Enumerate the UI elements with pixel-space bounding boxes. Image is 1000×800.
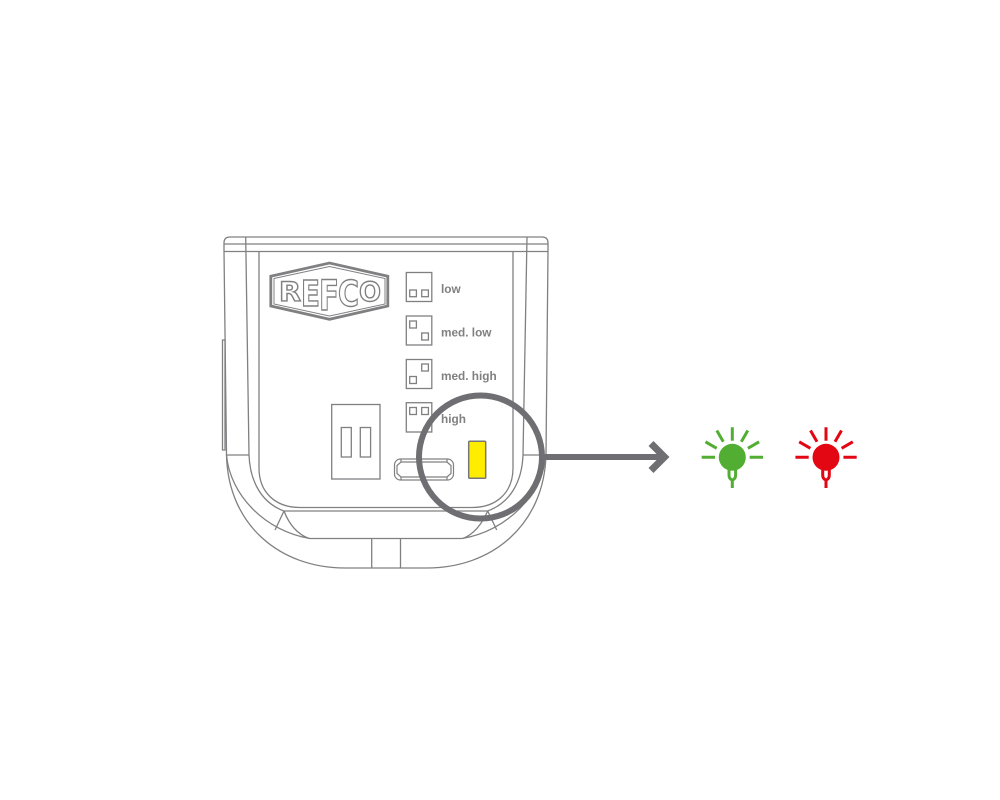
- icon: green LED: [702, 427, 763, 488]
- device housing outline: [222, 237, 548, 568]
- yellow LED indicator: [469, 441, 486, 478]
- label: med. low: med. low: [441, 326, 492, 340]
- REFCO logo: C: [338, 274, 359, 315]
- switch diagram: med. high: [406, 360, 432, 388]
- REFCO logo: R: [279, 277, 301, 308]
- label: high: high: [441, 412, 466, 426]
- switch diagram: high: [406, 403, 432, 432]
- USB port: [394, 459, 454, 480]
- REFCO logo: F: [319, 271, 339, 320]
- label: med. high: med. high: [441, 369, 497, 383]
- REFCO logo: O: [359, 277, 381, 308]
- icon: red LED: [795, 427, 857, 488]
- label: low: low: [441, 282, 461, 296]
- switch diagram: med. low: [406, 316, 432, 345]
- REFCO logo: [271, 263, 388, 320]
- switch diagram: low: [406, 272, 432, 302]
- power socket: [332, 404, 380, 479]
- arrow: [544, 444, 665, 470]
- REFCO logo: E: [301, 274, 320, 315]
- magnifier circle: [419, 396, 542, 518]
